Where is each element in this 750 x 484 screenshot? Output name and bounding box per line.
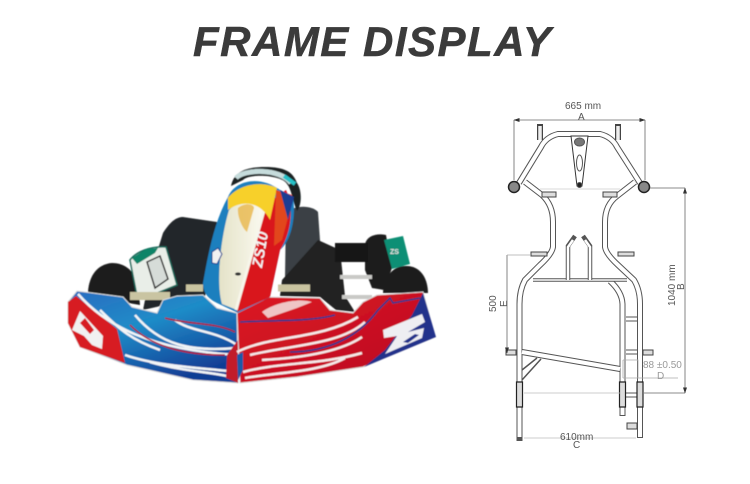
right bumper [237, 292, 436, 383]
dimension labels: 500 [488, 295, 499, 312]
dimension labels: E [499, 300, 510, 307]
right chassis dark [280, 240, 355, 312]
dimension labels: D [657, 371, 664, 382]
right green side panel [384, 236, 410, 269]
front top hoop [519, 134, 640, 183]
rear dark sleeves [516, 382, 643, 407]
dimension labels: 88 ±0.50 [643, 360, 682, 371]
dimension labels: 665 mm [565, 101, 601, 112]
kart photo illustration: ZS [390, 249, 399, 256]
centre prongs [568, 236, 590, 280]
dimension labels [488, 101, 687, 451]
engine dark mass [143, 217, 217, 310]
left side rail [516, 182, 553, 438]
front axle rods and springs [130, 292, 170, 300]
diagonal rear bar [522, 352, 620, 369]
nose cone [203, 181, 294, 313]
left green side panel [130, 247, 177, 296]
nose cone: ZS10 [249, 230, 272, 270]
frame technical drawing [506, 124, 653, 438]
kart photo illustration [68, 167, 436, 383]
title: FRAME DISPLAY [193, 18, 555, 65]
seat [285, 207, 322, 282]
dimension labels: C [573, 440, 580, 451]
dimension labels: A [578, 112, 585, 123]
right side rail [605, 182, 640, 438]
right rear upper tyre [365, 234, 392, 290]
rear silver rods [340, 277, 372, 297]
knuckle blocks [508, 182, 520, 192]
dimension labels: B [676, 283, 687, 290]
left rear tyre [88, 263, 140, 305]
cross bar upper [533, 278, 627, 282]
right rear lower tyre [383, 266, 428, 293]
dimension labels: 610mm [560, 432, 593, 443]
front uprights [540, 124, 618, 140]
inner right rail [610, 281, 622, 416]
left bumper [68, 291, 238, 383]
steering plate [571, 136, 588, 186]
dimension labels: 1040 mm [667, 264, 678, 306]
dimension lines [507, 120, 685, 438]
rear cross tubes [626, 319, 637, 395]
brackets [506, 192, 653, 429]
steering wheel [231, 167, 301, 211]
rear axle black [335, 243, 368, 262]
